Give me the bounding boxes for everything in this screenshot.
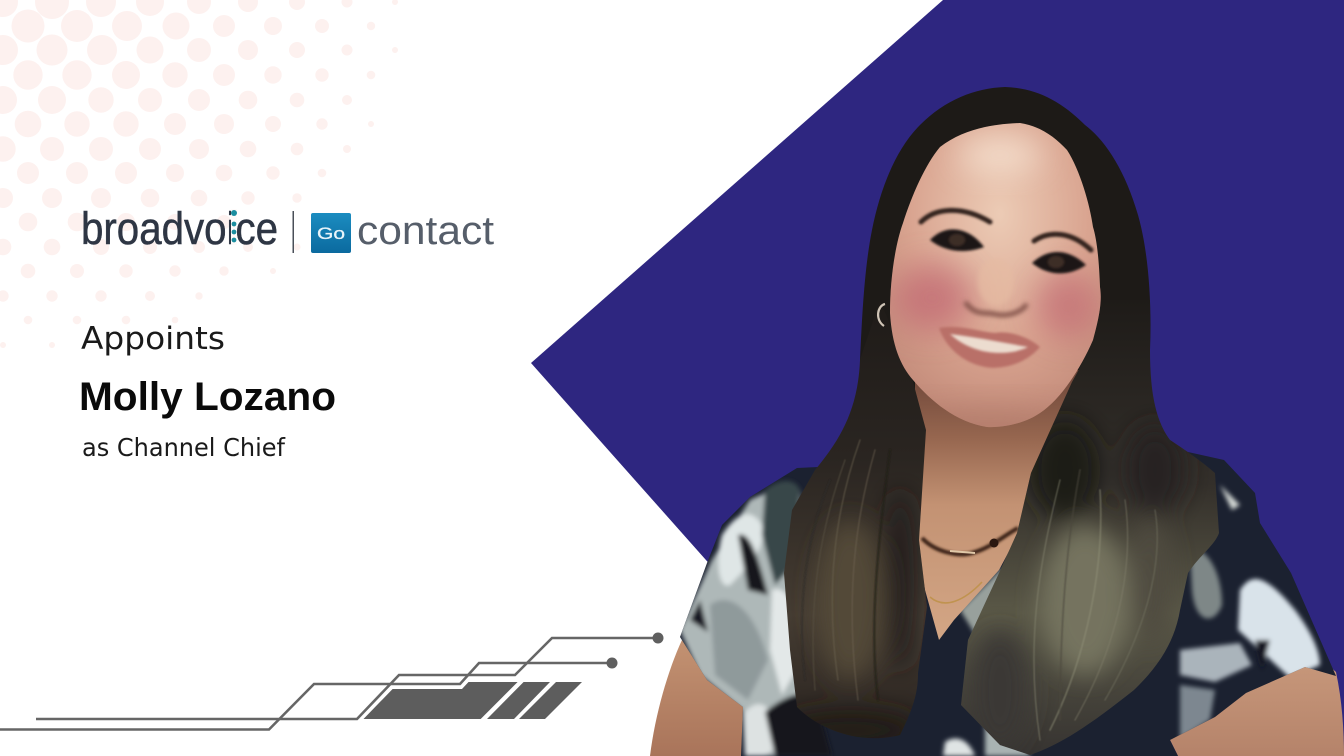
Go badge: Go [317,224,345,243]
blue arrow background shape [531,0,1344,756]
broadvoice wordmark: broadvoice [81,203,278,254]
text: role: as Channel Chief [82,433,286,462]
shirt [680,450,1336,756]
left hair section [784,360,927,738]
shirt floral blotches center [943,565,1030,756]
shirt floral blotches right [1180,478,1320,740]
shirt floral blotches left [680,481,832,756]
hair back [860,87,1150,440]
forehead highlight [958,137,1042,173]
arms [650,640,1344,756]
jaw shading [944,403,1045,427]
logo divider [292,211,294,253]
eyes [930,229,1086,273]
necklaces [922,528,1018,603]
cheek blush [892,264,972,332]
contact wordmark: contact [357,209,494,253]
earring [878,304,885,326]
mouth [939,327,1040,368]
text: Appoints: Appoints [81,321,225,357]
face [890,123,1101,448]
circuit line graphic [0,632,664,730]
right hair section [955,300,1225,756]
portrait of Molly Lozano [650,87,1344,756]
text: name: Molly Lozano [79,375,336,419]
nose [965,258,1027,315]
neck and chest [915,370,1080,640]
eyebrows [921,210,1091,250]
Go badge [311,213,351,253]
halftone dot pattern [0,0,398,348]
logo: broadvoice and GoContact [81,203,494,254]
